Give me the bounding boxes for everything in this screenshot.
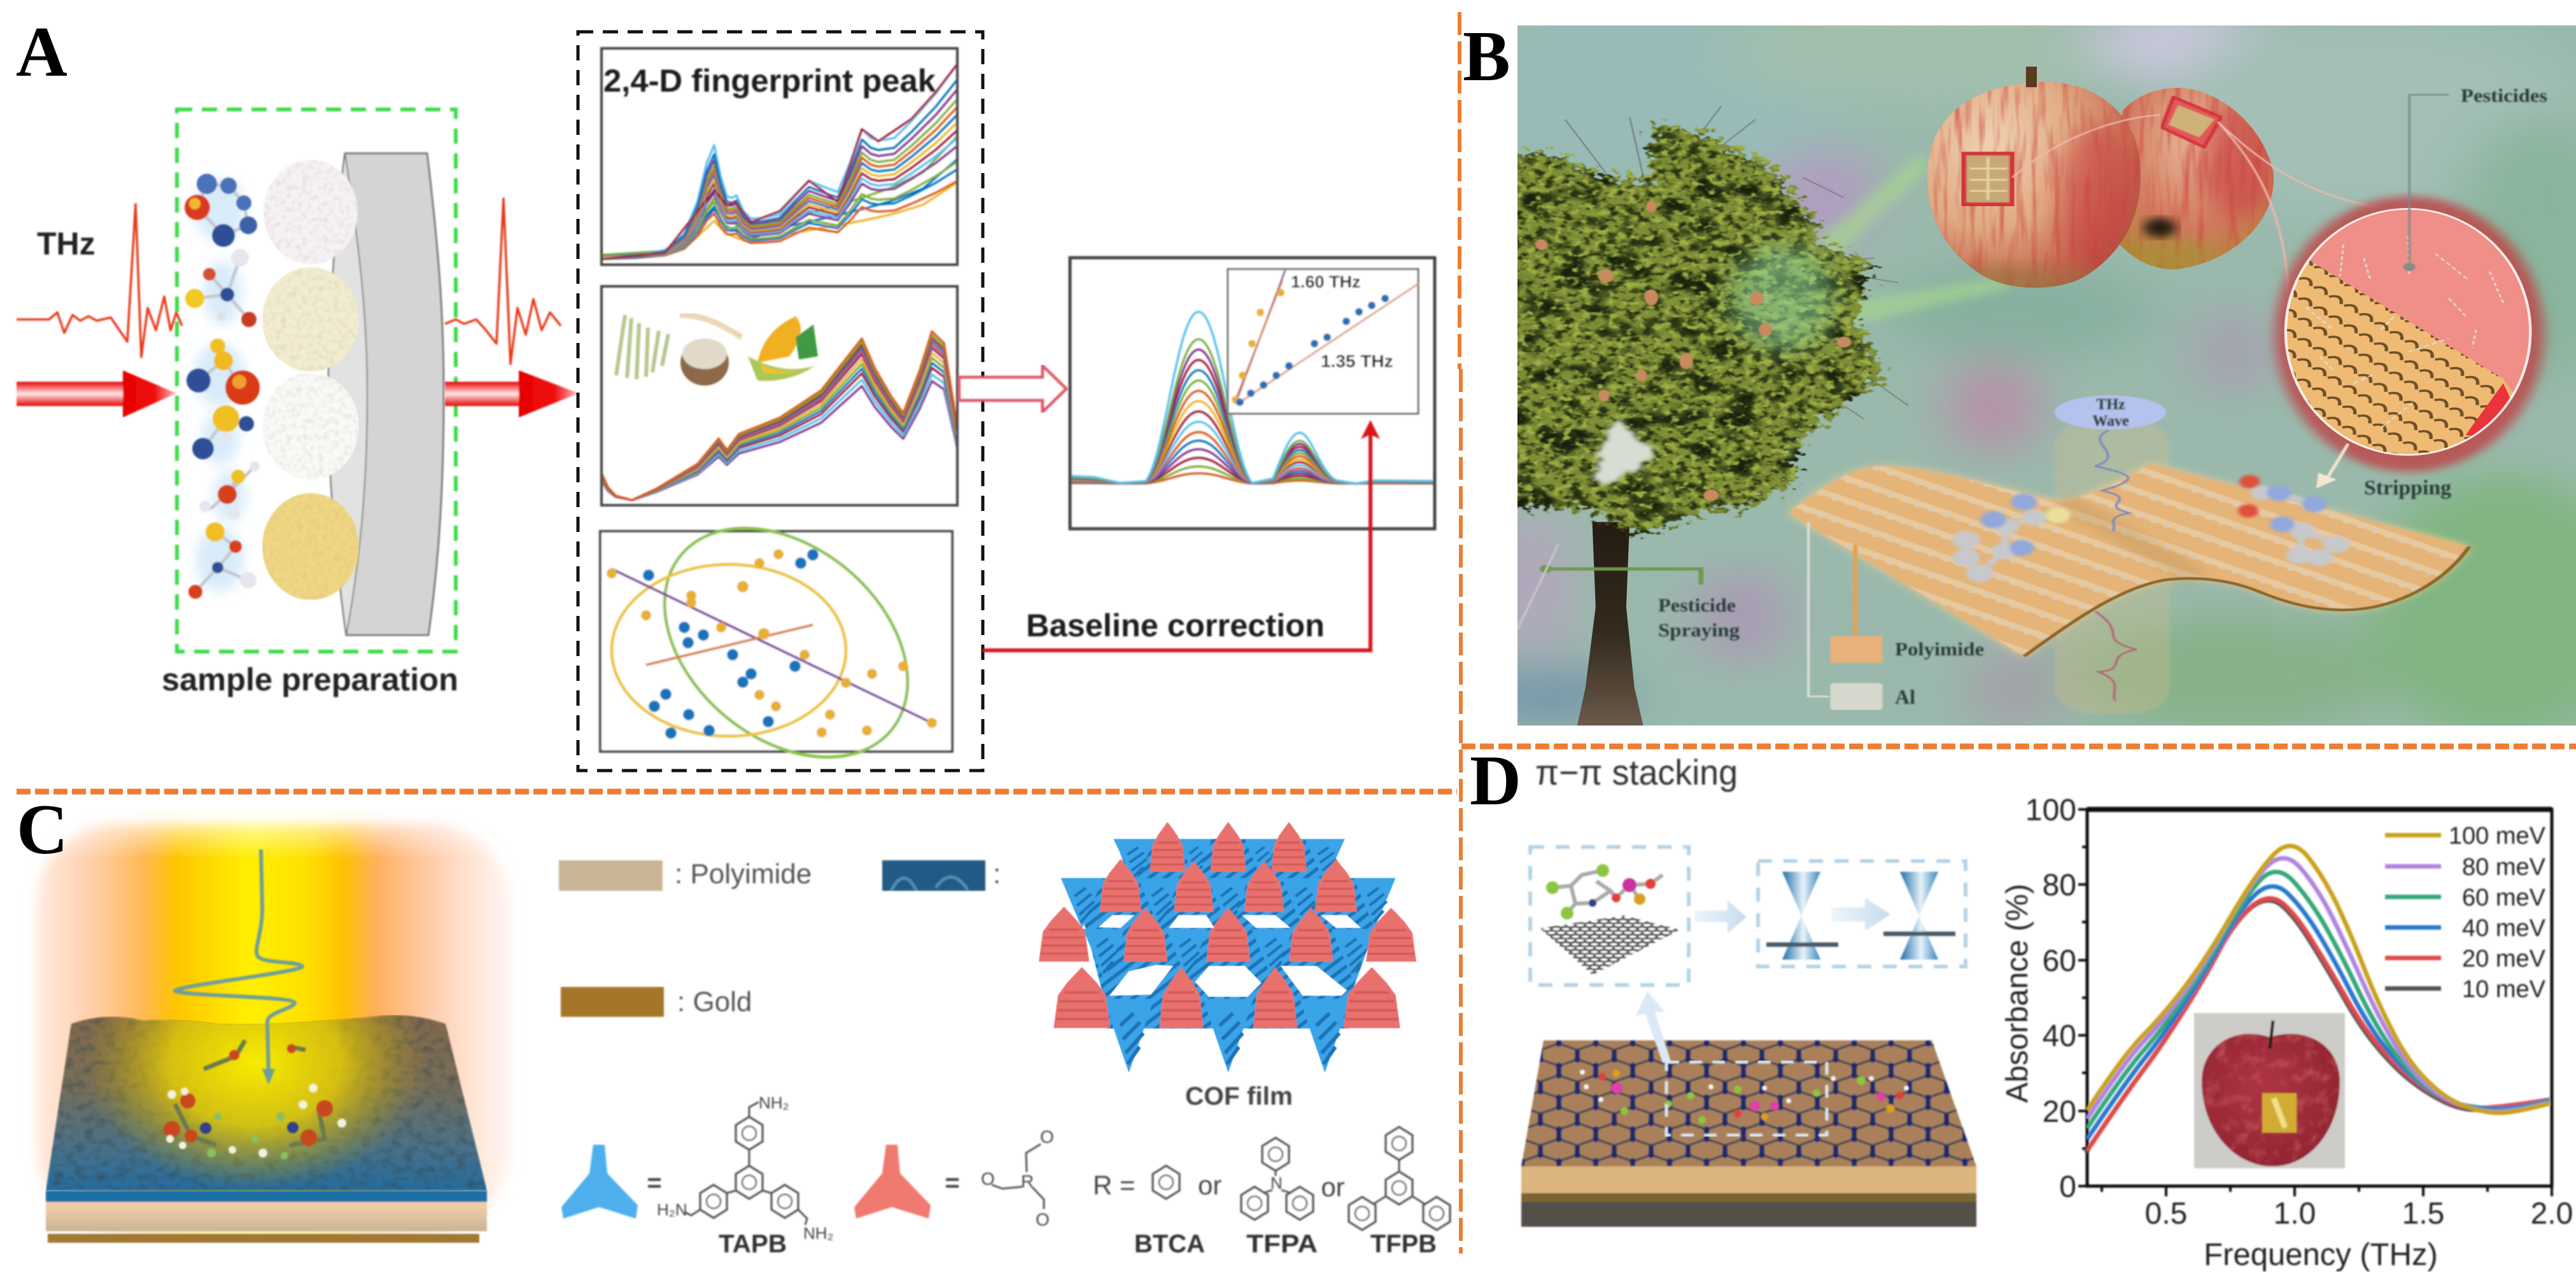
x axis labels bbox=[2145, 1197, 2573, 1231]
aldehyde structure bbox=[945, 1127, 1054, 1229]
yellow field on surface bbox=[83, 935, 426, 1190]
scene artwork bbox=[1517, 25, 2576, 725]
aldehyde structure: = bbox=[945, 1169, 960, 1197]
sensor patch on left apple bbox=[1963, 153, 2013, 205]
legend: COF film swatch: : bbox=[993, 858, 1001, 890]
label D: D bbox=[1470, 741, 1521, 820]
x axis labels: 1.5 bbox=[2402, 1197, 2444, 1231]
THz wave with arrow bbox=[175, 849, 302, 1085]
spraying leader arrow bbox=[1517, 544, 1701, 629]
hollow arrow to corrected spectra bbox=[959, 366, 1066, 412]
legend: 100 meV bbox=[2449, 823, 2546, 849]
x axis labels: 2.0 bbox=[2531, 1197, 2573, 1231]
zoom connector lines bbox=[2013, 115, 2395, 303]
TAPB structure: H₂N bbox=[657, 1200, 687, 1219]
legend: 80 meV bbox=[2462, 854, 2546, 881]
leader lines bbox=[1808, 95, 2449, 697]
adsorbed molecules on graphene bbox=[1580, 1070, 1909, 1124]
sample preparation caption: sample preparation bbox=[162, 662, 458, 697]
red monomer shape bbox=[854, 1145, 931, 1219]
small apples on tree bbox=[1535, 201, 1851, 501]
tree branches bbox=[1565, 106, 1908, 419]
scene labels: THz bbox=[2096, 396, 2125, 413]
y axis labels: 20 bbox=[2043, 1095, 2076, 1129]
green glow on foliage bbox=[1731, 244, 1834, 352]
arrow up to inset bbox=[1636, 991, 1671, 1063]
TAPB label: TAPB bbox=[719, 1230, 787, 1258]
y axis labels: 80 bbox=[2043, 869, 2076, 902]
COF film caption: COF film bbox=[1185, 1082, 1293, 1110]
spray mist on tree bbox=[1594, 417, 1657, 486]
scene labels: Stripping bbox=[2364, 477, 2452, 500]
label C: C bbox=[17, 790, 68, 869]
COF surface block top bbox=[46, 1015, 487, 1191]
TAPB structure: = bbox=[647, 1169, 662, 1197]
x axis title: Frequency (THz) bbox=[2204, 1238, 2438, 1272]
layered graphene sensor block bbox=[1521, 1040, 1976, 1227]
legend: gold: : Gold bbox=[677, 986, 752, 1017]
tree foliage bbox=[1477, 122, 1885, 535]
TAPB structure: NH₂ bbox=[803, 1224, 834, 1243]
molecules under the beam bbox=[164, 1040, 346, 1159]
legend: gold bbox=[561, 986, 752, 1017]
aldehyde structure: O bbox=[1040, 1127, 1054, 1147]
dashed selection on graphene bbox=[1666, 1062, 1827, 1135]
molecule models bbox=[185, 174, 260, 599]
aldehyde structure: O bbox=[981, 1169, 995, 1189]
transmitted THz arrow bbox=[445, 370, 579, 417]
TAPB structure bbox=[647, 1093, 834, 1243]
y axis labels: 60 bbox=[2043, 944, 2076, 978]
heading: pi-pi stacking: π−π stacking bbox=[1535, 752, 1738, 792]
apple right bbox=[2116, 88, 2276, 273]
sensor patch on right apple bbox=[2162, 97, 2221, 147]
magnified surface with pesticides bbox=[2279, 204, 2537, 464]
powder samples bbox=[262, 160, 359, 600]
icons: crops (lemongrass, wheat, rice bowl, corn) bbox=[616, 315, 818, 386]
plot frame and ticks bbox=[2078, 809, 2552, 1196]
arrow to Dirac cones bbox=[1694, 900, 1747, 933]
panel D: graphene sensing and absorbance bbox=[1470, 741, 2573, 1272]
aldehyde structure: R bbox=[1021, 1171, 1034, 1191]
scene labels: Polyimide bbox=[1895, 639, 1984, 660]
panel A: THz fingerprint workflow bbox=[16, 13, 1435, 804]
PCA scatter plot bbox=[600, 482, 952, 804]
R substituent options: N bbox=[1270, 1173, 1283, 1192]
spectra chart 1 bbox=[602, 48, 957, 265]
scene labels: Spraying bbox=[1658, 620, 1740, 641]
black dashed spectra box bbox=[578, 32, 983, 771]
polyimide swatch bbox=[1830, 636, 1883, 663]
legend bbox=[2385, 823, 2546, 1003]
yellow light glow bbox=[25, 814, 522, 1229]
inset: linear fit plot bbox=[1228, 269, 1418, 414]
magnified circle glow bbox=[2275, 197, 2544, 472]
baseline corrected spectra chart bbox=[1070, 258, 1435, 529]
inset: linear fit plot: 1.60 THz bbox=[1291, 272, 1361, 291]
legend: COF film swatch bbox=[882, 858, 1001, 891]
aldehyde structure: O bbox=[1036, 1210, 1050, 1229]
TAPB structure: NH₂ bbox=[759, 1093, 789, 1112]
R substituent options: or bbox=[1198, 1170, 1221, 1200]
apple calyx bbox=[2144, 218, 2176, 237]
legend: 40 meV bbox=[2462, 915, 2546, 942]
THz pulse waveforms bbox=[17, 199, 561, 364]
TFPB label: TFPB bbox=[1370, 1230, 1437, 1258]
absorbance curves bbox=[2086, 846, 2550, 1152]
scene labels: Wave bbox=[2092, 413, 2129, 430]
COF lattice bbox=[1039, 822, 1416, 1073]
pesticide molecules on sheet bbox=[1953, 475, 2349, 582]
y axis title: Absorbance (%) bbox=[2001, 884, 2034, 1103]
y axis labels: 100 bbox=[2025, 793, 2076, 827]
inset: linear fit plot: 1.35 THz bbox=[1321, 351, 1393, 371]
TFPA label: TFPA bbox=[1246, 1230, 1318, 1258]
molecule on graphene inset bbox=[1530, 847, 1689, 985]
green light beams bbox=[1819, 153, 2007, 325]
Dirac cones inset bbox=[1758, 861, 1966, 967]
blue monomer shape bbox=[561, 1145, 638, 1219]
y axis labels bbox=[2025, 793, 2076, 1204]
flexible metasurface sheet glow bbox=[1789, 464, 2469, 656]
panel B: pesticide detection on apple scene bbox=[1449, 0, 2576, 741]
baseline correction arrow bbox=[983, 420, 1380, 650]
label A: A bbox=[16, 13, 67, 92]
legend: 10 meV bbox=[2462, 976, 2546, 1003]
scene labels bbox=[1658, 85, 2547, 708]
R substituent options bbox=[1093, 1127, 1450, 1230]
y axis labels: 0 bbox=[2059, 1170, 2076, 1204]
tree trunk bbox=[1577, 522, 1643, 725]
panel C: COF film sensor bbox=[17, 790, 1450, 1258]
THz beam column bbox=[2055, 419, 2170, 715]
sample holder disk bbox=[328, 153, 444, 635]
flexible metasurface sheet bbox=[1789, 464, 2469, 656]
apple stem bbox=[2026, 67, 2037, 87]
baseline correction label: Baseline correction bbox=[1026, 608, 1325, 643]
legend: polyimide: : Polyimide bbox=[675, 858, 812, 890]
absorbance chart bbox=[2001, 793, 2573, 1272]
apple left bbox=[1927, 82, 2141, 294]
legend: polyimide bbox=[559, 858, 812, 891]
THz wave curves bbox=[2095, 430, 2136, 701]
scene labels: Pesticides bbox=[2461, 85, 2547, 106]
legend: 20 meV bbox=[2462, 946, 2546, 972]
label B: B bbox=[1463, 17, 1510, 96]
legend: 60 meV bbox=[2462, 884, 2546, 911]
x axis labels: 0.5 bbox=[2145, 1197, 2187, 1231]
incident THz arrow bbox=[17, 370, 176, 417]
y axis labels: 40 bbox=[2043, 1019, 2076, 1053]
chart heading: 2,4-D fingerprint peak: 2,4-D fingerprint peak bbox=[603, 63, 936, 99]
THz wave ellipse bbox=[2055, 395, 2166, 430]
BTCA label: BTCA bbox=[1134, 1230, 1205, 1258]
stripping arrow bbox=[2316, 444, 2348, 489]
scene labels: Al bbox=[1895, 685, 1915, 708]
blurred background bbox=[1517, 25, 2576, 725]
scene labels: Pesticide bbox=[1658, 595, 1736, 616]
x axis labels: 1.0 bbox=[2274, 1197, 2316, 1231]
inset apple photo bbox=[2194, 1013, 2345, 1168]
R substituent options: R = bbox=[1093, 1170, 1136, 1200]
Al swatch bbox=[1830, 683, 1883, 710]
R substituent options: or bbox=[1321, 1172, 1345, 1202]
substrate layers bbox=[46, 1191, 487, 1243]
THz label: THz bbox=[37, 226, 95, 262]
green dashed sample box bbox=[177, 109, 456, 652]
spectra chart 2 bbox=[602, 286, 957, 505]
